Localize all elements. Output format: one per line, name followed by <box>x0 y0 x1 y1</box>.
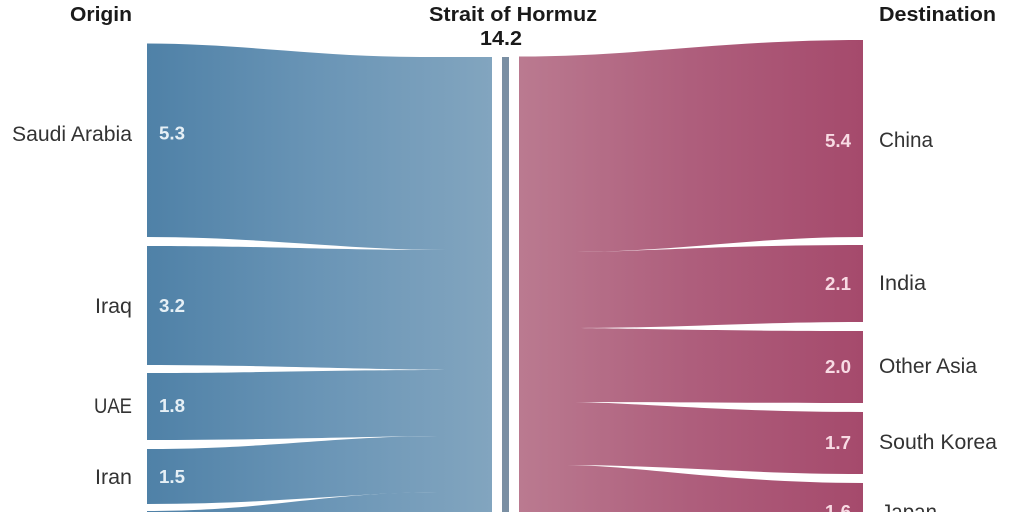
flow: Saudi Arabia: 5.3 <box>159 124 185 144</box>
heading: strait of hormuz total: Strait of Hormuz <box>429 3 597 26</box>
flow: Iraq: 3.2 <box>159 296 185 316</box>
flow: Other Asia: 2.0 <box>825 357 851 377</box>
flow: Iraq <box>95 246 492 370</box>
flow: South Korea: South Korea <box>879 431 997 454</box>
flow: Iran: Iran <box>95 466 132 489</box>
flow: India: 2.1 <box>825 274 851 294</box>
panel: destination flows <box>519 40 997 512</box>
heading: strait of hormuz total <box>429 3 597 50</box>
flow: India: India <box>879 272 926 295</box>
flow: Saudi Arabia <box>12 44 492 250</box>
heading: destination: Destination <box>879 3 996 26</box>
flow: South Korea <box>519 402 997 474</box>
heading: strait of hormuz total: 14.2 <box>480 27 522 50</box>
panel: origin flows <box>12 44 492 512</box>
flow: China: 5.4 <box>825 131 851 151</box>
flow: China <box>519 40 933 252</box>
flow: India <box>519 245 926 328</box>
flow: Iran <box>95 436 492 504</box>
flow: UAE: 1.8 <box>159 396 185 416</box>
flow: Other Asia: Other Asia <box>879 355 977 378</box>
flow: UAE <box>94 370 492 440</box>
flow: China: China <box>879 129 933 152</box>
flow: Saudi Arabia: Saudi Arabia <box>12 123 132 146</box>
flow: South Korea: 1.7 <box>825 433 851 453</box>
flow: Other Asia <box>519 328 977 403</box>
flow: Iraq: Iraq <box>95 295 132 318</box>
heading: origin: Origin <box>70 3 132 26</box>
flow: next origin <box>147 492 492 512</box>
flow: Japan <box>519 465 937 512</box>
flow: UAE: UAE <box>94 395 132 418</box>
flow: Iran: 1.5 <box>159 467 185 487</box>
strait of hormuz bar <box>502 57 509 512</box>
